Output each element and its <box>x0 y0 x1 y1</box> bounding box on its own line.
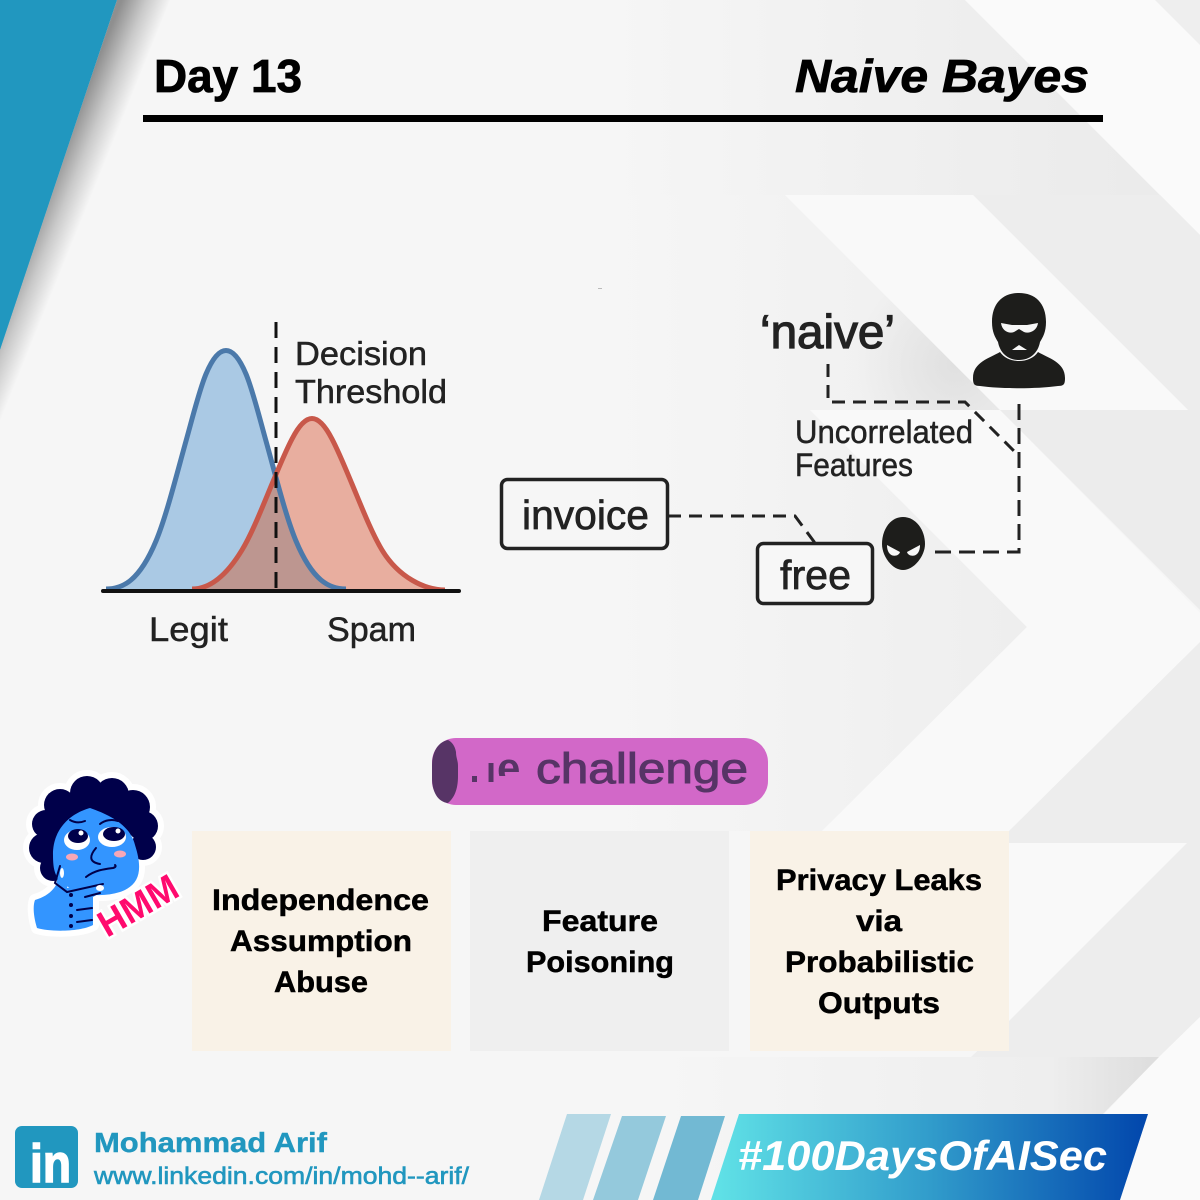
card: independence assumption abuse <box>192 831 451 1051</box>
sticker cheeks <box>66 850 126 860</box>
connector: naive to features <box>828 364 1017 454</box>
card: privacy leaks: Privacy Leaks <box>776 864 982 897</box>
legit curve <box>106 350 346 589</box>
banner: hashtag <box>711 1114 1148 1200</box>
banner stripes <box>539 1114 725 1200</box>
threshold label: Threshold <box>295 373 447 410</box>
chart: legit vs spam distributions <box>103 322 459 649</box>
card: privacy leaks: Probabilistic <box>785 946 974 979</box>
sticker features <box>70 820 118 877</box>
sticker word: HMM <box>90 866 185 945</box>
sticker outline <box>29 776 158 931</box>
pill: the challenge <box>432 738 768 805</box>
card: independence assumption abuse: Abuse <box>274 966 368 999</box>
card: independence assumption abuse: Independence <box>212 884 429 917</box>
label: uncorrelated features: Uncorrelated <box>795 414 973 450</box>
sticker face <box>53 808 139 895</box>
card: feature poisoning: Feature <box>542 905 658 938</box>
pill: partially hidden word: ı <box>486 749 496 790</box>
icon: linkedin: in <box>30 1134 71 1194</box>
box: free <box>758 544 872 604</box>
card: privacy leaks <box>750 831 1009 1051</box>
axis labels: Spam <box>327 611 416 649</box>
overlap region <box>192 478 346 589</box>
card: privacy leaks: via <box>856 905 902 938</box>
card: feature poisoning <box>470 831 729 1051</box>
sticker: thinking character <box>29 776 185 945</box>
box: invoice: invoice <box>522 492 649 538</box>
label: uncorrelated features: Features <box>795 447 913 483</box>
heading: day: Day 13 <box>154 50 302 102</box>
icon: small mask <box>882 517 925 570</box>
corner accent: blue triangle with shadow <box>0 0 170 425</box>
author url: www.linkedin.com/in/mohd--arif/ <box>93 1163 469 1190</box>
banner: hashtag: #100DaysOfAISec <box>738 1132 1107 1179</box>
spam curve <box>192 418 445 590</box>
diagram: attack on naive assumption <box>502 293 1065 604</box>
pill: dark left cap <box>432 740 458 803</box>
sticker hand <box>34 865 107 931</box>
threshold line <box>274 322 278 591</box>
connector: invoice to free <box>668 516 815 543</box>
box: free: free <box>780 552 851 598</box>
card: independence assumption abuse: Assumption <box>230 925 412 958</box>
legit fill <box>106 350 346 589</box>
threshold label <box>295 335 447 410</box>
axis labels <box>149 611 416 649</box>
pill: label: challenge <box>536 745 748 793</box>
icon: linkedin <box>15 1126 78 1194</box>
spam fill <box>192 418 445 590</box>
box: invoice <box>502 480 668 548</box>
icon: masked attacker <box>973 293 1065 388</box>
connector: attacker to mask <box>935 397 1019 552</box>
label: naive: ‘naive’ <box>760 305 895 358</box>
label: uncorrelated features <box>795 414 973 483</box>
card: feature poisoning: Poisoning <box>526 946 674 979</box>
axis labels: Legit <box>149 611 229 649</box>
heading rule <box>143 115 1103 122</box>
heading: topic: Naive Bayes <box>795 50 1089 102</box>
card: privacy leaks: Outputs <box>818 987 940 1020</box>
axis <box>103 589 459 593</box>
pill: partially hidden word: e <box>497 744 520 791</box>
sticker hair <box>29 776 158 881</box>
pill: partially hidden word <box>472 760 519 782</box>
sticker eyes <box>64 827 126 850</box>
speck <box>598 288 602 289</box>
threshold label: Decision <box>295 335 427 372</box>
author name: Mohammad Arif <box>94 1127 328 1158</box>
